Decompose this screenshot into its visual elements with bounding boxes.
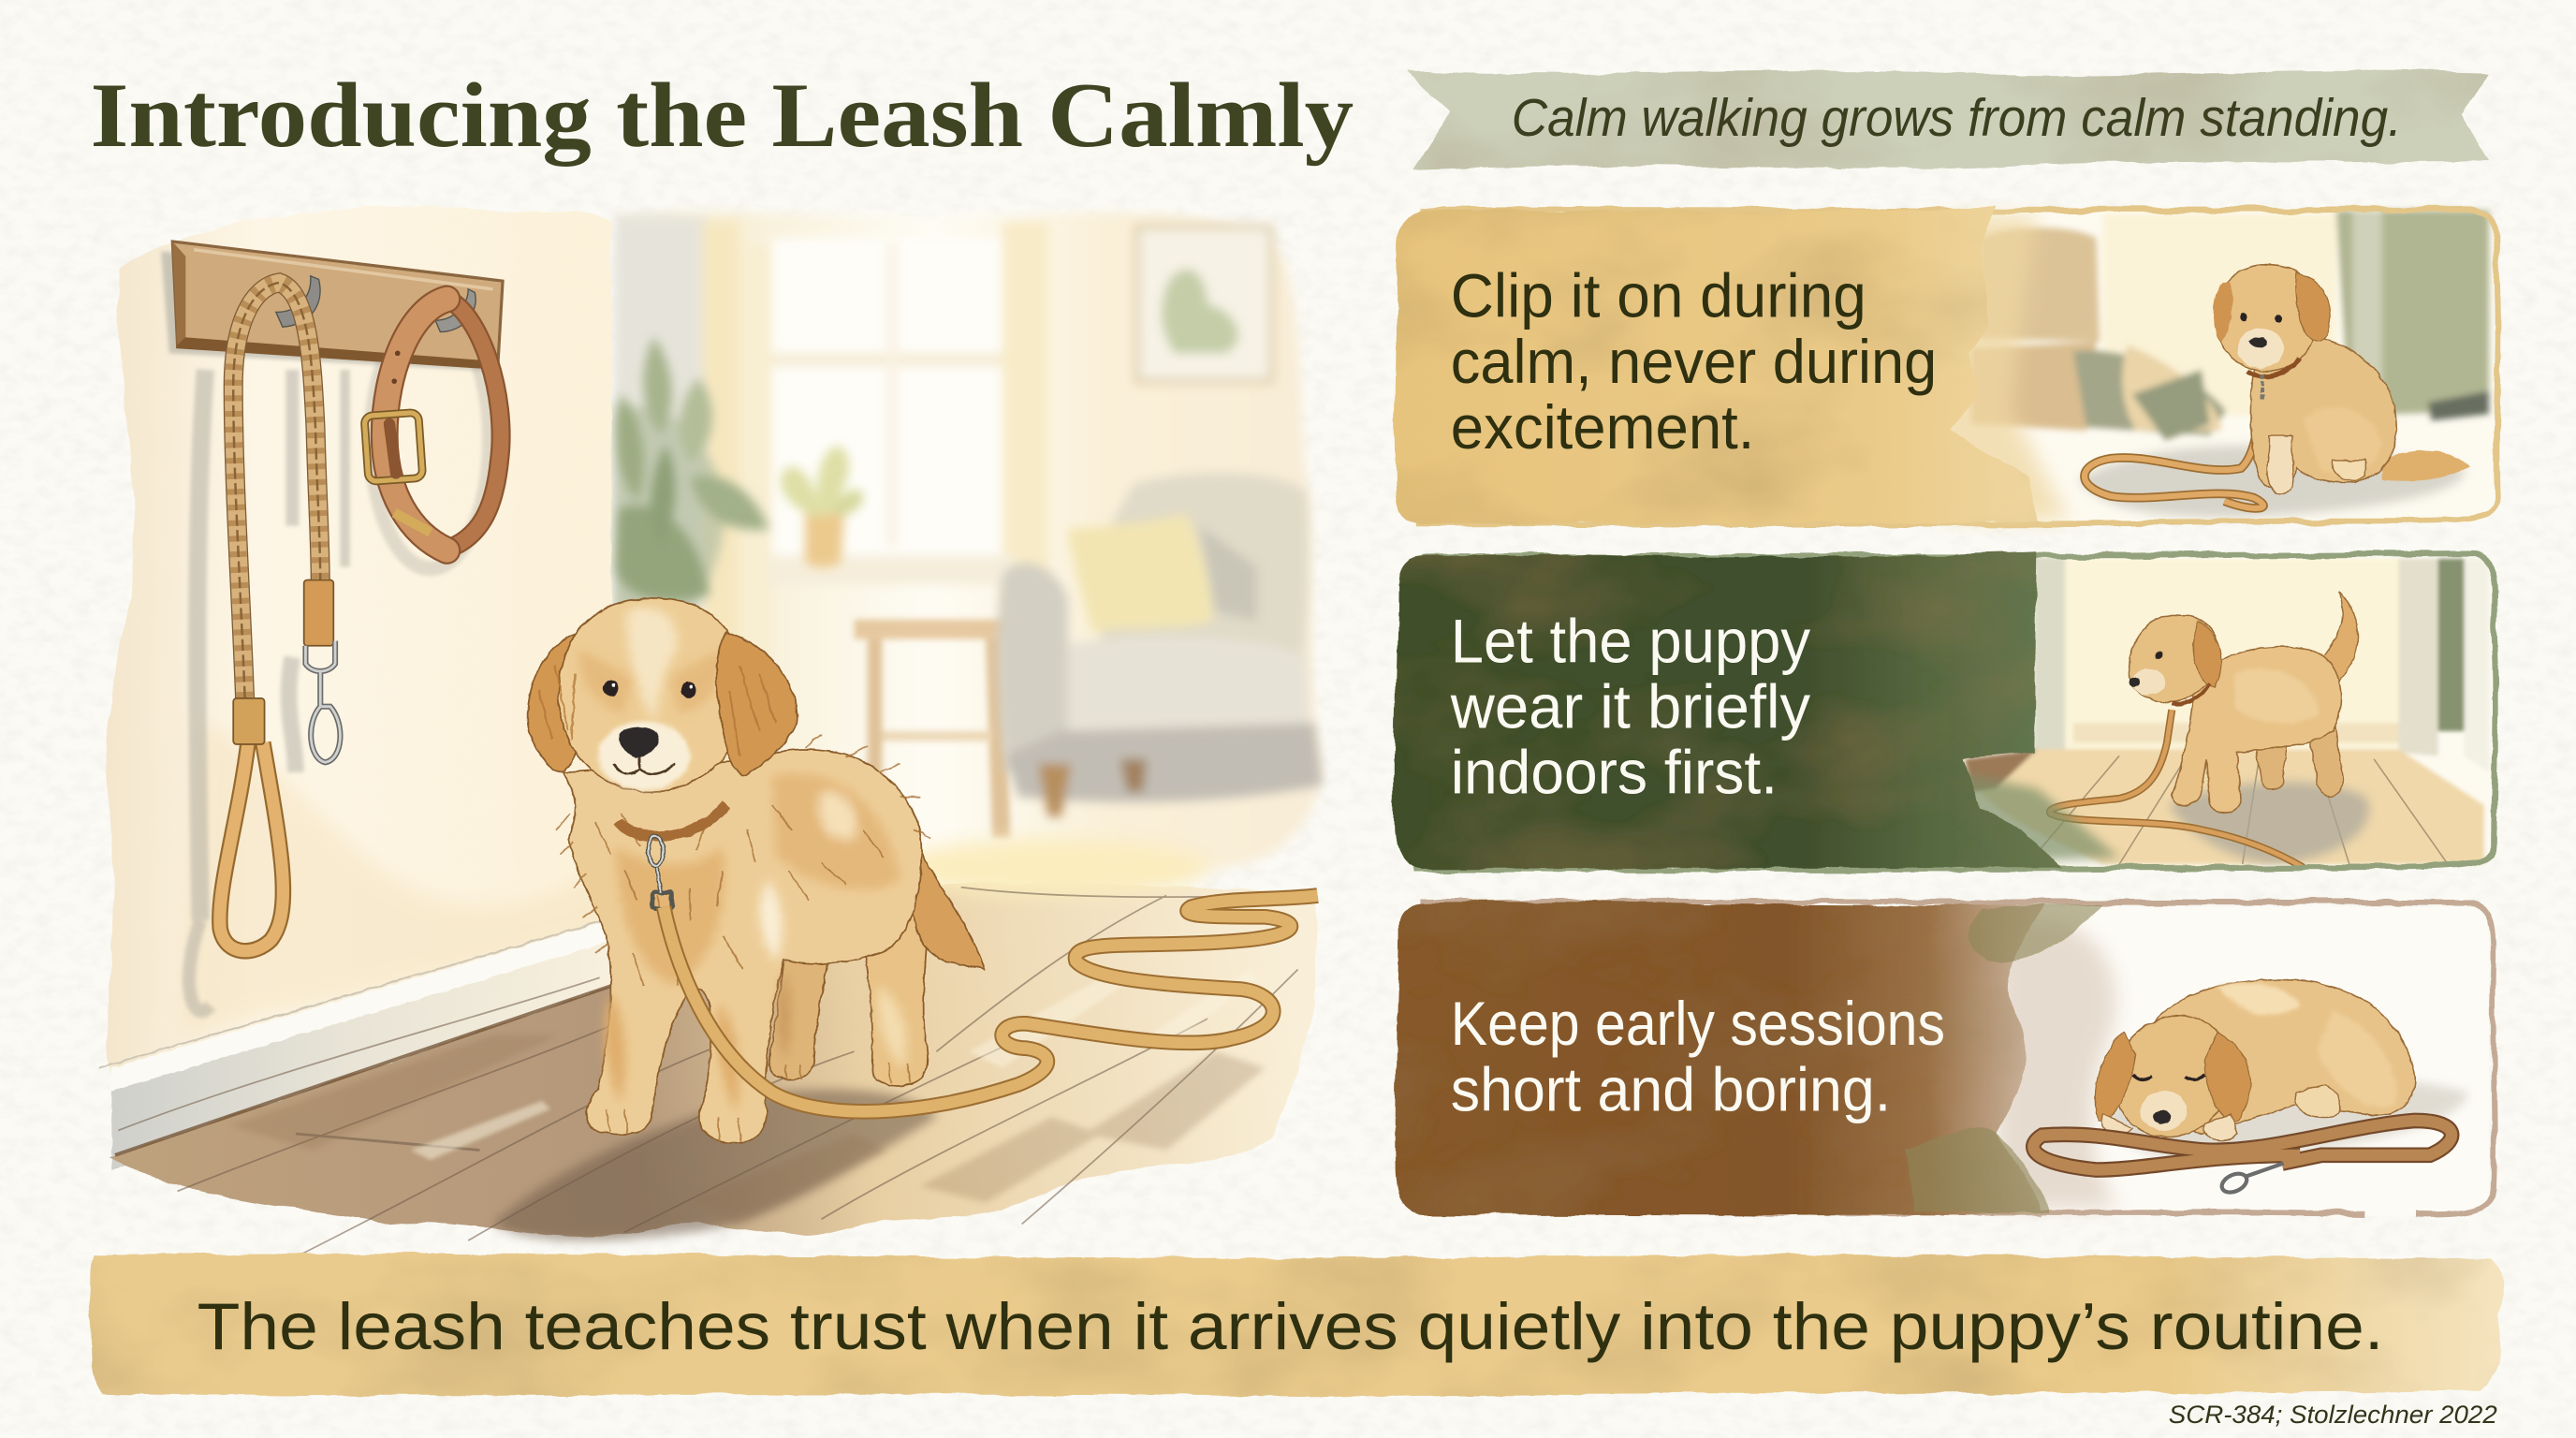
card text: Let the puppy bbox=[1451, 606, 1810, 675]
olive patches bbox=[1906, 903, 2103, 1212]
card text bbox=[1451, 261, 1937, 462]
card 2: wear it briefly indoors bbox=[1395, 552, 2496, 870]
citation: SCR-384; Stolzlechner 2022 bbox=[2169, 1400, 2497, 1429]
head bbox=[2115, 1016, 2231, 1137]
leash bbox=[2033, 1121, 2452, 1170]
head bbox=[558, 598, 745, 792]
braided leash on hook bbox=[220, 283, 340, 951]
clasp bbox=[648, 836, 672, 909]
card text: Clip it on during bbox=[1451, 261, 1866, 330]
card text: wear it briefly bbox=[1450, 671, 1810, 741]
right ear bbox=[716, 633, 798, 775]
banner: tagline: Calm walking grows from calm standing. bbox=[1512, 88, 2402, 148]
collar bbox=[618, 805, 726, 836]
floor leash bbox=[664, 895, 1318, 1111]
left ear bbox=[528, 633, 592, 771]
illustration: resting puppy bbox=[1971, 907, 2489, 1216]
small vase plant bbox=[781, 446, 863, 567]
title: Introducing the Leash Calmly bbox=[91, 65, 1354, 167]
card border bbox=[1419, 902, 2495, 1214]
plant bbox=[614, 337, 768, 611]
muzzle bbox=[598, 721, 690, 790]
room background bbox=[611, 212, 1323, 986]
card text bbox=[1451, 989, 1945, 1123]
wall wash bbox=[106, 206, 611, 1077]
fur strokes bbox=[557, 734, 931, 1142]
card text: calm, never during bbox=[1451, 327, 1937, 396]
wall picture bbox=[1137, 227, 1271, 381]
floor glow bbox=[896, 840, 1208, 895]
leash loop bbox=[2085, 399, 2263, 508]
wall shadows bbox=[189, 370, 345, 1011]
side table bbox=[855, 620, 1018, 838]
leash bbox=[2050, 710, 2304, 868]
body bbox=[2172, 647, 2341, 813]
ear fur bbox=[539, 666, 775, 756]
far legs bbox=[2254, 707, 2343, 796]
card text: Keep early sessions bbox=[1451, 989, 1945, 1058]
leather end and clasp bbox=[304, 580, 333, 646]
bottom takeaway band bbox=[89, 1254, 2502, 1397]
bottom takeaway band: The leash teaches trust when it arrives quietly into the puppy’s routine. bbox=[198, 1289, 2384, 1363]
floor bbox=[109, 883, 1317, 1237]
far leg bbox=[768, 953, 831, 1079]
card text bbox=[1450, 606, 1810, 807]
brass keeper bbox=[233, 698, 265, 744]
armchair bbox=[998, 474, 1323, 816]
icon: clasp bbox=[2219, 1164, 2284, 1196]
card text: excitement. bbox=[1451, 392, 1754, 462]
main illustration: puppy, leash and room bbox=[98, 206, 1323, 1257]
fur patches bbox=[605, 773, 907, 1114]
card 3: keep sessions short bbox=[1395, 902, 2495, 1216]
wall plank with hooks bbox=[161, 242, 503, 372]
banner: tagline bbox=[1408, 70, 2489, 169]
floor planks bbox=[118, 888, 1306, 1257]
card wash bbox=[1396, 207, 2037, 524]
eyes bbox=[604, 681, 695, 698]
card text: indoors first. bbox=[1451, 738, 1778, 807]
illustration: standing puppy bbox=[1955, 557, 2494, 868]
soft gold fade bbox=[1939, 217, 2070, 520]
puppy bbox=[528, 598, 984, 1143]
icon: hook bbox=[276, 276, 320, 327]
soft green fade bbox=[1939, 772, 2119, 864]
collar on hook bbox=[364, 299, 501, 550]
card wash bbox=[1395, 902, 2045, 1216]
rear leg bbox=[862, 871, 929, 1086]
card wash bbox=[1395, 552, 2062, 869]
card 1: clip it on during calm bbox=[1396, 207, 2498, 524]
baseboard bbox=[98, 918, 611, 1170]
card border bbox=[1416, 209, 2498, 524]
illustration: sitting puppy bbox=[1955, 211, 2494, 522]
body bbox=[564, 749, 921, 1143]
nose and mouth bbox=[620, 727, 659, 757]
card text: short and boring. bbox=[1451, 1054, 1891, 1123]
tail bbox=[903, 838, 984, 969]
card border bbox=[1416, 553, 2496, 870]
